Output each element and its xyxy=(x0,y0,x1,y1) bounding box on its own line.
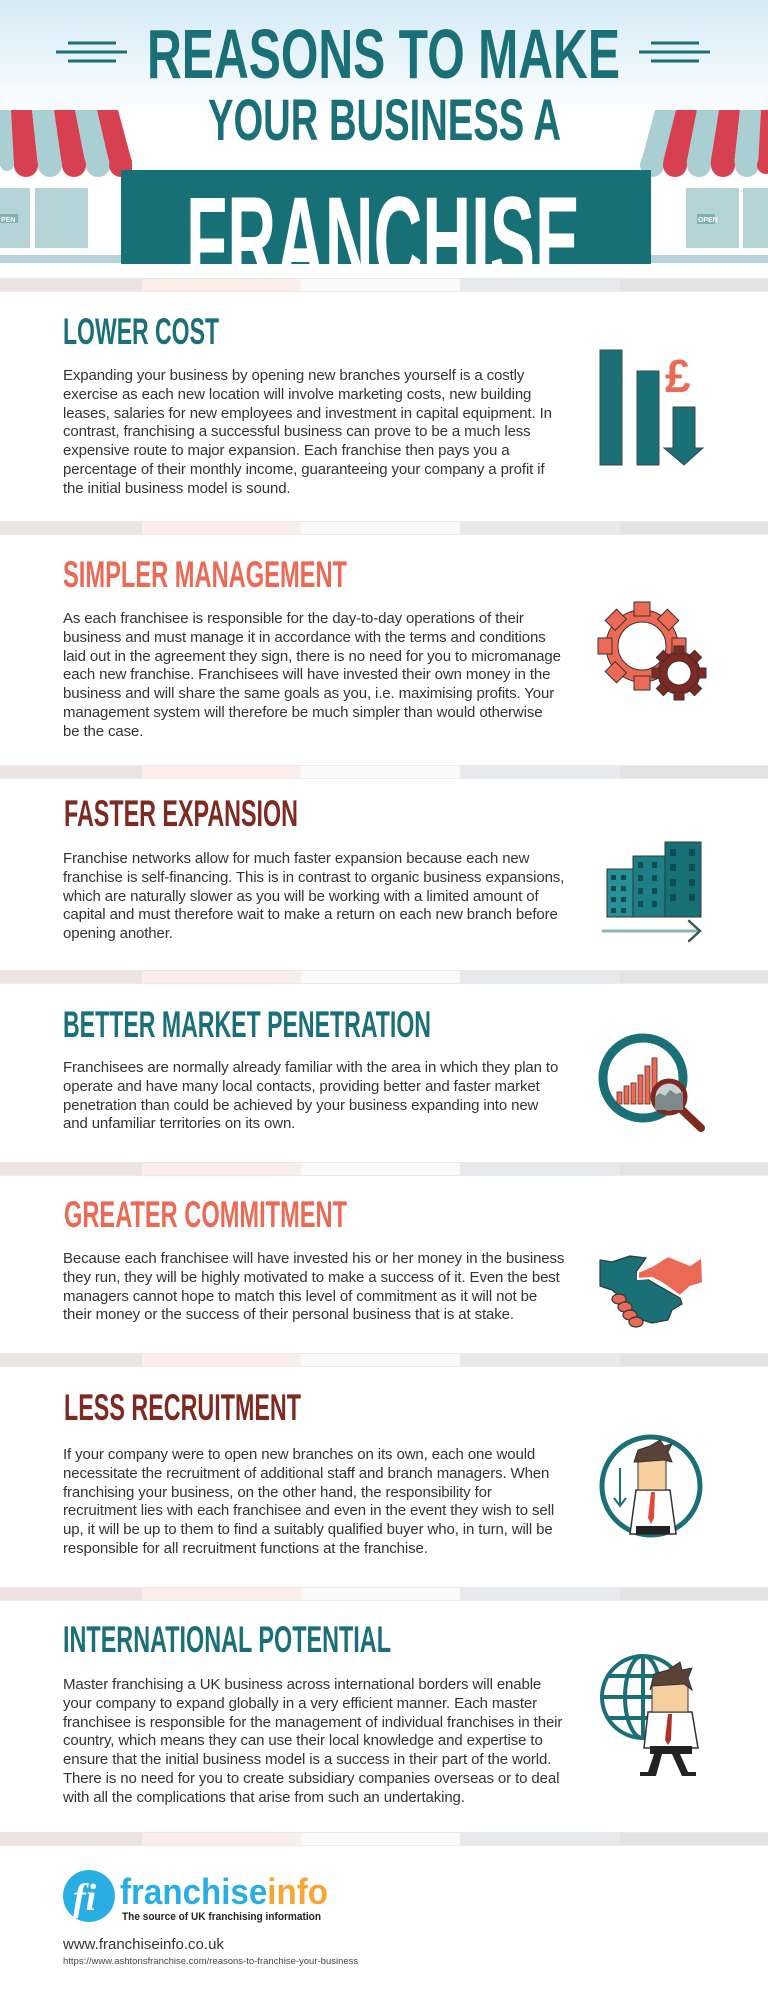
logo: franchiseinfo xyxy=(63,1870,328,1923)
text: international potential: franchisee is responsible for the management of individual franchises in their xyxy=(63,1714,562,1731)
heading: faster expansion: FASTER EXPANSION xyxy=(64,793,298,834)
heading: international potential: INTERNATIONAL POTENTIAL xyxy=(63,1619,391,1660)
text: simpler management xyxy=(63,610,561,740)
icon: bars with pound down arrow: £ xyxy=(665,350,691,402)
text: international potential: your company to expand globally in a very efficient manner. Each master xyxy=(63,1695,537,1712)
footer: website: www.franchiseinfo.co.uk xyxy=(63,1936,224,1953)
text: less recruitment: franchising your business, on the other hand, the responsibility for xyxy=(63,1484,492,1501)
text: lower cost: percentage of their monthly income, guaranteeing your company a profit if xyxy=(63,461,545,478)
text: lower cost: the initial business model is sound. xyxy=(63,480,290,497)
text: faster expansion: capital and must therefore wait to make a return on each new branch before xyxy=(63,906,558,923)
icon: gears xyxy=(598,602,706,700)
icon: buildings with arrow xyxy=(602,842,702,942)
icon: fi circle xyxy=(63,1870,115,1922)
icon: magnifier with chart xyxy=(598,1034,705,1132)
text: faster expansion: franchise is self-financing. This is in contrast to organic business expansions, xyxy=(63,869,564,886)
heading: greater commitment: GREATER COMMITMENT xyxy=(64,1194,347,1235)
text: faster expansion: Franchise networks allow for much faster expansion because each new xyxy=(63,850,529,867)
heading: better market penetration: BETTER MARKET PENETRATION xyxy=(63,1004,431,1045)
heading: less recruitment: LESS RECRUITMENT xyxy=(64,1387,301,1428)
text: simpler management: be the case. xyxy=(63,723,143,740)
text: lower cost: expensive route to major expansion. Each franchise then pays you a xyxy=(63,442,510,459)
text: simpler management: each new franchise. Franchisees will have invested their own money in the xyxy=(63,666,550,683)
text: less recruitment: recruitment lies with each franchisee and even in the event they wish to sell xyxy=(63,1502,554,1519)
text: greater commitment: Because each franchisee will have invested his or her money in the business xyxy=(63,1250,564,1267)
text: international potential: There is no need for you to create subsidiary companies overseas or to deal xyxy=(63,1770,559,1787)
text: less recruitment xyxy=(63,1446,554,1557)
text: greater commitment: their money or the success of their personal business that is at stake. xyxy=(63,1306,514,1323)
storefront right xyxy=(640,110,768,263)
icon: handshake xyxy=(599,1255,702,1328)
icon: person in oval xyxy=(600,1434,702,1538)
separator xyxy=(0,970,768,984)
separator xyxy=(0,1162,768,1176)
text: less recruitment: responsible for all recruitment functions at the franchise. xyxy=(63,1540,428,1557)
separator xyxy=(0,1832,768,1846)
text: better market penetration: operate and have many local contacts, providing better and faster market xyxy=(63,1078,540,1095)
text: international potential xyxy=(63,1676,562,1806)
heading: lower cost: LOWER COST xyxy=(63,311,219,352)
header background xyxy=(0,0,768,275)
logo: franchiseinfo: franchiseinfo xyxy=(120,1871,328,1912)
text: better market penetration: Franchisees are normally already familiar with the area in which they plan to xyxy=(63,1059,558,1076)
storefront left: PEN xyxy=(1,217,15,224)
text: less recruitment: necessitate the recruitment of additional staff and branch managers. When xyxy=(63,1465,549,1482)
text: international potential: Master franchising a UK business across international borders will enable xyxy=(63,1676,541,1693)
text: less recruitment: If your company were to open new branches on its own, each one would xyxy=(63,1446,535,1463)
text: better market penetration: penetration than could be achieved by your business expanding into new xyxy=(63,1097,538,1114)
text: international potential: ensure that the initial business model is a success in their part of the world. xyxy=(63,1751,551,1768)
icon: globe with person xyxy=(600,1654,699,1776)
separator xyxy=(0,278,768,292)
text: lower cost: leases, salaries for new employees and investment in capital equipment. In xyxy=(63,405,552,422)
separator xyxy=(0,1353,768,1367)
text: simpler management: business and must manage it in accordance with the terms and conditions xyxy=(63,629,546,646)
text: simpler management: laid out in the agreement they sign, there is no need for you to micromanage xyxy=(63,648,561,665)
separator xyxy=(0,1587,768,1601)
text: lower cost xyxy=(63,367,552,497)
text: greater commitment: they run, they will be highly motivated to make a success of it. Even the best xyxy=(63,1269,560,1286)
text: lower cost: Expanding your business by opening new branches yourself is a costly xyxy=(63,367,524,384)
text: simpler management: management system will therefore be much simpler than would otherwise xyxy=(63,704,542,721)
text: greater commitment: managers cannot hope to match this level of commitment as it will not be xyxy=(63,1288,537,1305)
heading: simpler management: SIMPLER MANAGEMENT xyxy=(63,554,347,595)
text: international potential: country, which means they can use their local knowledge and expertise to xyxy=(63,1732,543,1749)
text: less recruitment: up, it will be up to them to find a suitably qualified buyer who, in turn, will be xyxy=(63,1521,553,1538)
text: lower cost: contrast, franchising a successful business can prove to be a much less xyxy=(63,423,531,440)
text: faster expansion: which are naturally slower as you will be working with a limited amount of xyxy=(63,888,539,905)
title: YOUR BUSINESS A xyxy=(208,88,561,153)
text: international potential: with all the complications that arise from such an undertaking. xyxy=(63,1789,465,1806)
icon: fi circle: fi xyxy=(73,1877,97,1919)
text: simpler management: As each franchisee is responsible for the day-to-day operations of their xyxy=(63,610,524,627)
storefront left xyxy=(0,110,132,263)
footer: source url: https://www.ashtonsfranchise.com/reasons-to-franchise-your-business xyxy=(63,1956,358,1967)
separator xyxy=(0,521,768,535)
text: lower cost: exercise as each new location will involve marketing costs, new building xyxy=(63,386,531,403)
text: faster expansion xyxy=(63,850,564,942)
storefront right: OPEN xyxy=(698,217,718,224)
text: better market penetration xyxy=(63,1059,558,1132)
separator xyxy=(0,765,768,779)
icon: bars with pound down arrow xyxy=(600,350,704,466)
title xyxy=(121,15,651,264)
text: greater commitment xyxy=(63,1250,564,1323)
text: better market penetration: and unfamiliar territories on its own. xyxy=(63,1115,295,1132)
title decorative lines xyxy=(56,43,710,61)
text: simpler management: business and will share the same goals as you, i.e. maximising profits. Your xyxy=(63,685,554,702)
text: faster expansion: opening another. xyxy=(63,925,173,942)
